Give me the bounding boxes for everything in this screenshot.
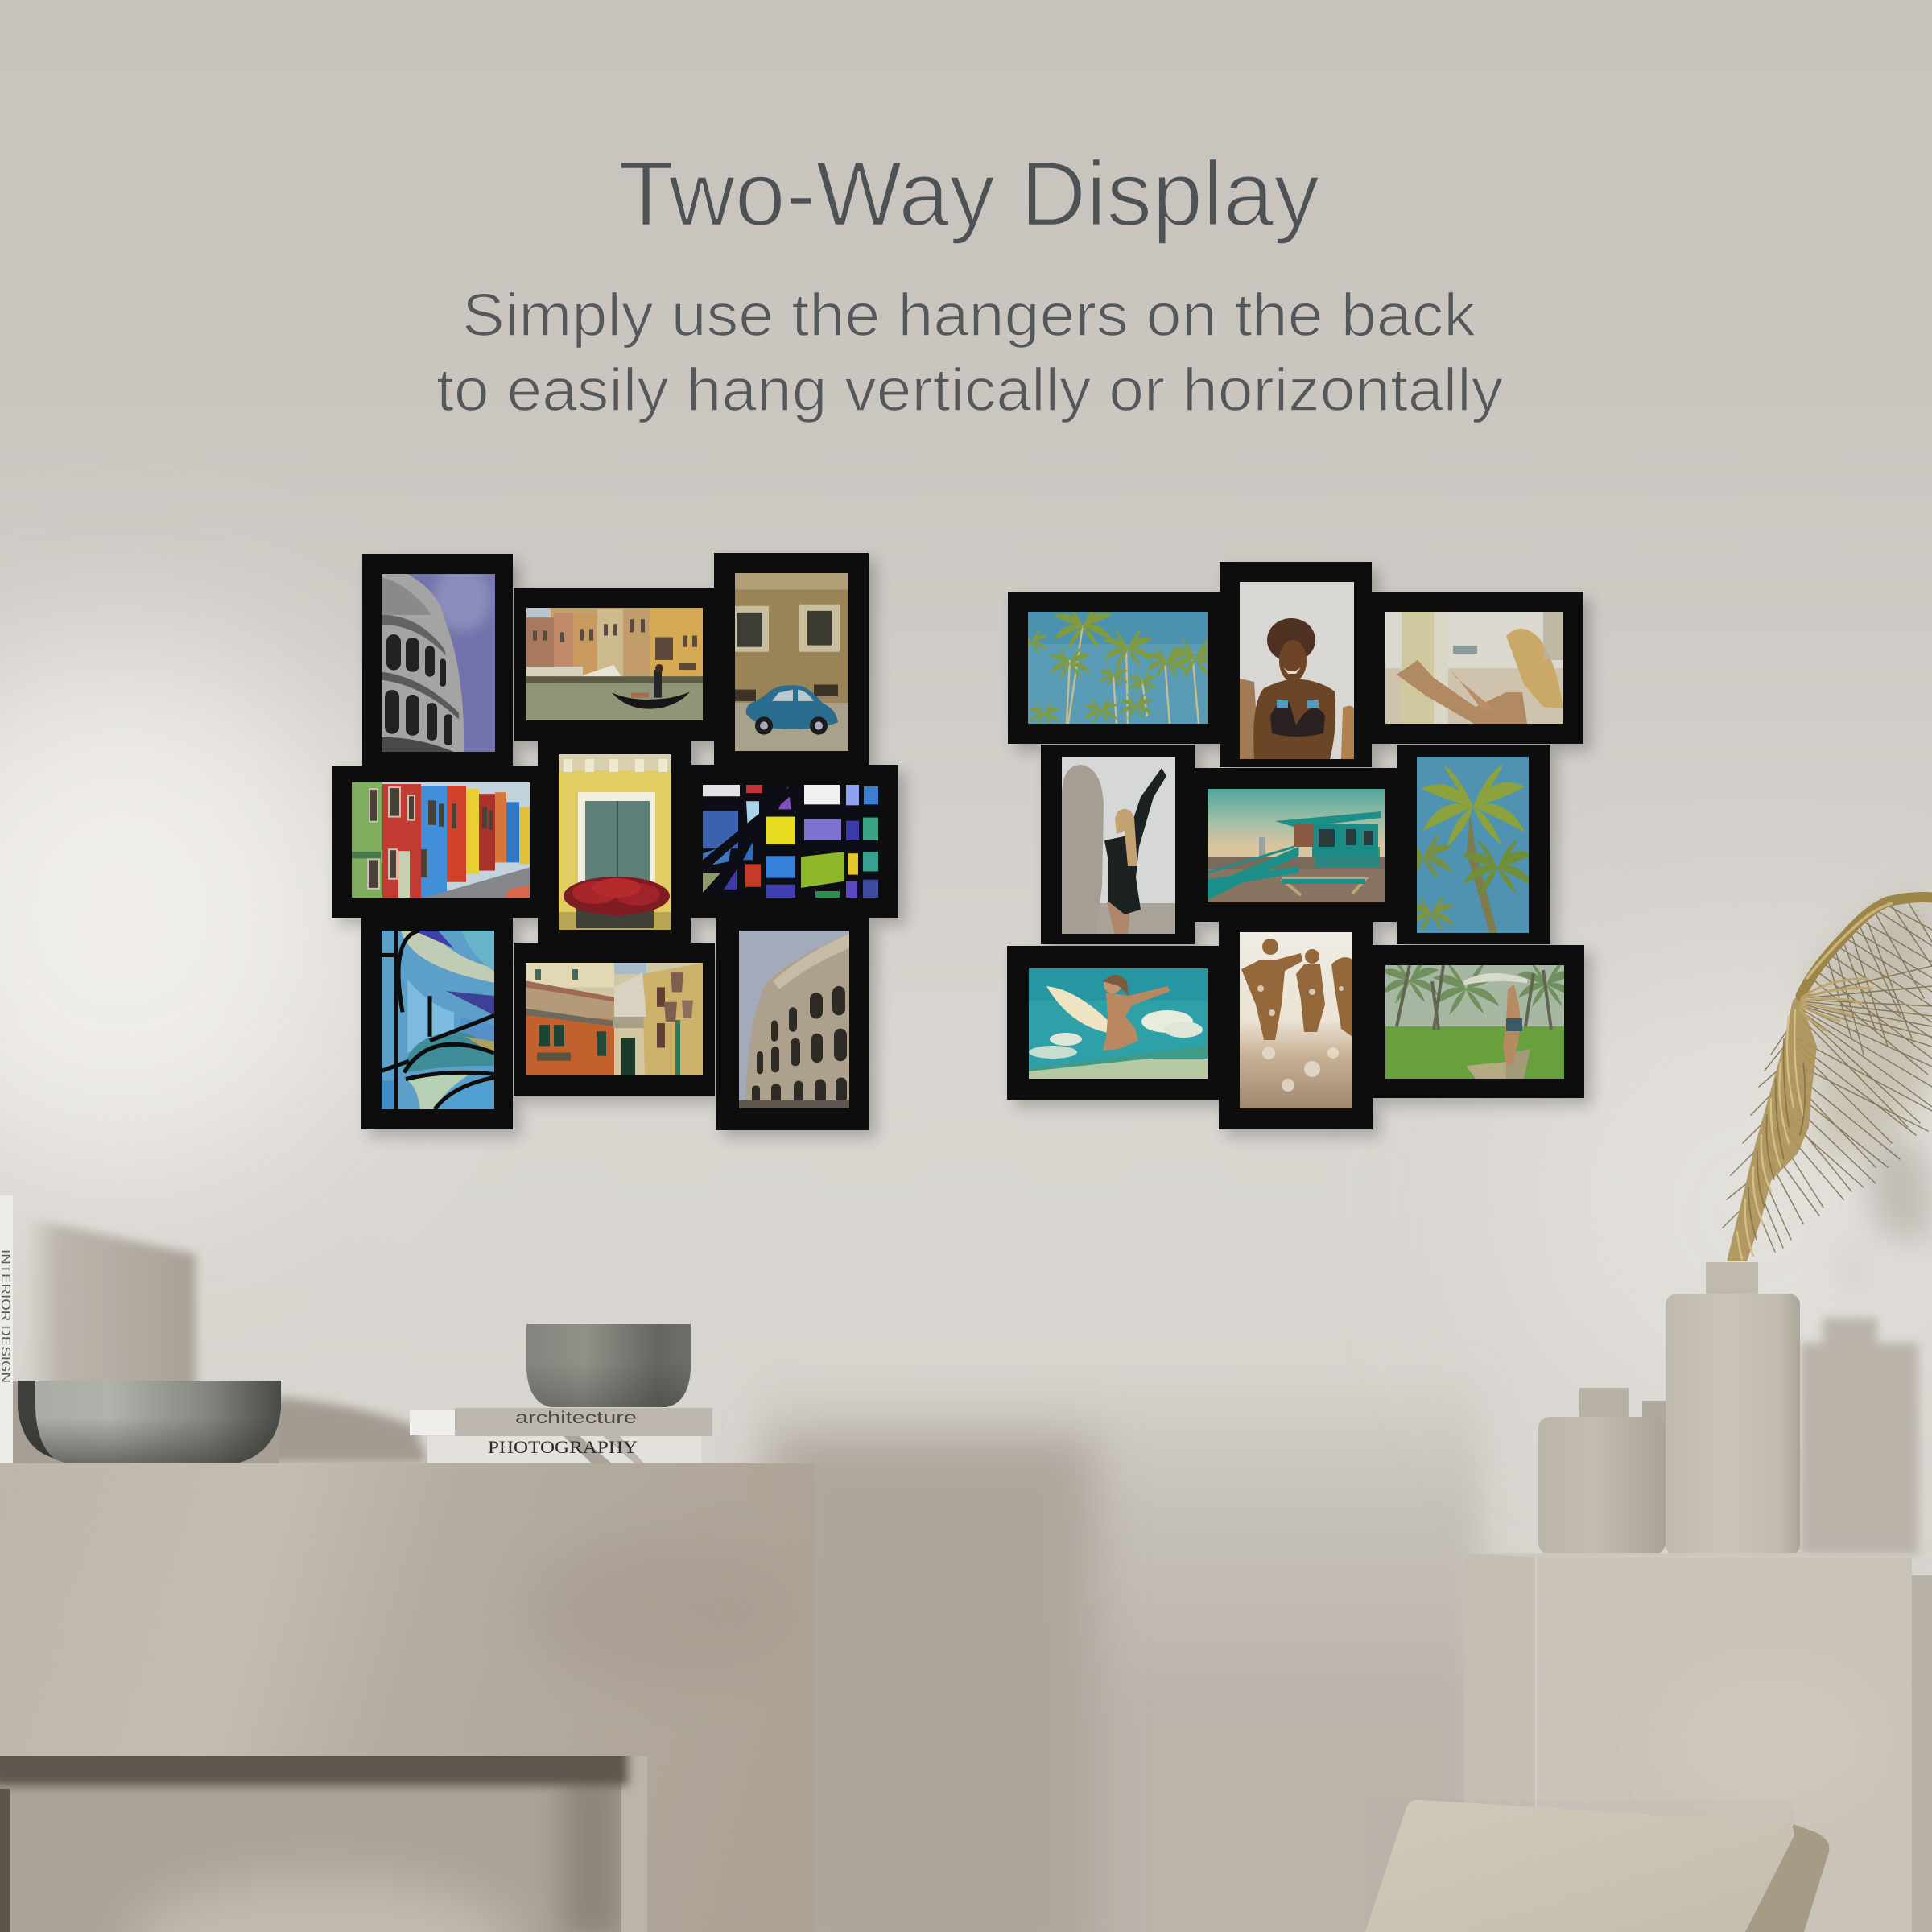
recess under tabletop	[0, 1747, 647, 1932]
frame: leaning tower of Pisa	[362, 554, 513, 771]
frame: blue Fiat car	[714, 553, 869, 771]
frame: Colosseum	[716, 910, 869, 1130]
frame: surfer on jungle path	[1365, 945, 1584, 1098]
frame: Venice canal	[514, 588, 715, 741]
frame: friends running into the surf	[1219, 922, 1373, 1129]
frame: woman with surfboard looking at the sea	[1365, 592, 1583, 744]
frame: palm trees	[1008, 592, 1228, 744]
frame: stained glass grid	[691, 765, 898, 918]
frame: woman jumping with surfboard	[1007, 946, 1228, 1100]
frond upper arc and knot fan	[1801, 898, 1932, 996]
grey bowl	[18, 1381, 281, 1463]
frond hair strands	[1723, 902, 1932, 1252]
frond density haze	[1811, 900, 1932, 1159]
books: architecture and PHOTOGRAPHY: PHOTOGRAPHY	[488, 1437, 638, 1457]
subtitle line 1: Simply use the hangers on the back	[462, 281, 1476, 349]
frame: Venice street with lamp	[514, 943, 715, 1096]
concrete console table	[0, 1463, 815, 1932]
armchair back	[1365, 1800, 1829, 1932]
title: Two-Way Display	[618, 143, 1319, 246]
frame: colourful Burano houses	[332, 766, 538, 918]
dried palm frond	[1723, 898, 1932, 1261]
large beige vase	[1666, 1262, 1800, 1556]
frame: surfer with longboard	[1041, 745, 1195, 944]
books: architecture and PHOTOGRAPHY: architecture	[515, 1408, 637, 1427]
right plinth	[1464, 1553, 1932, 1932]
wall shadow from bowl	[13, 1217, 428, 1463]
grey cup	[526, 1324, 691, 1407]
frame: stained glass curves	[361, 910, 513, 1129]
subtitle line 2: to easily hang vertically or horizontally	[436, 356, 1504, 423]
frame: lifeguard tower	[1187, 768, 1406, 922]
left frame collage: horizontal layout with travel photos	[332, 553, 898, 1130]
book spine: INTERIOR DESIGN	[0, 1195, 13, 1463]
frame: yellow wall with teal door and red flowers	[538, 731, 691, 952]
frame: palm tree against blue sky	[1394, 745, 1550, 944]
vase shadow on wall	[1642, 1318, 1918, 1555]
small beige vase	[1538, 1388, 1666, 1554]
right frame collage: vertical layout with beach photos	[1007, 562, 1584, 1129]
palm frond shadow on wall	[1839, 1140, 1932, 1296]
frond body	[1727, 990, 1817, 1261]
books: architecture and PHOTOGRAPHY	[410, 1408, 712, 1463]
frame: woman laughing on beach	[1220, 562, 1372, 767]
